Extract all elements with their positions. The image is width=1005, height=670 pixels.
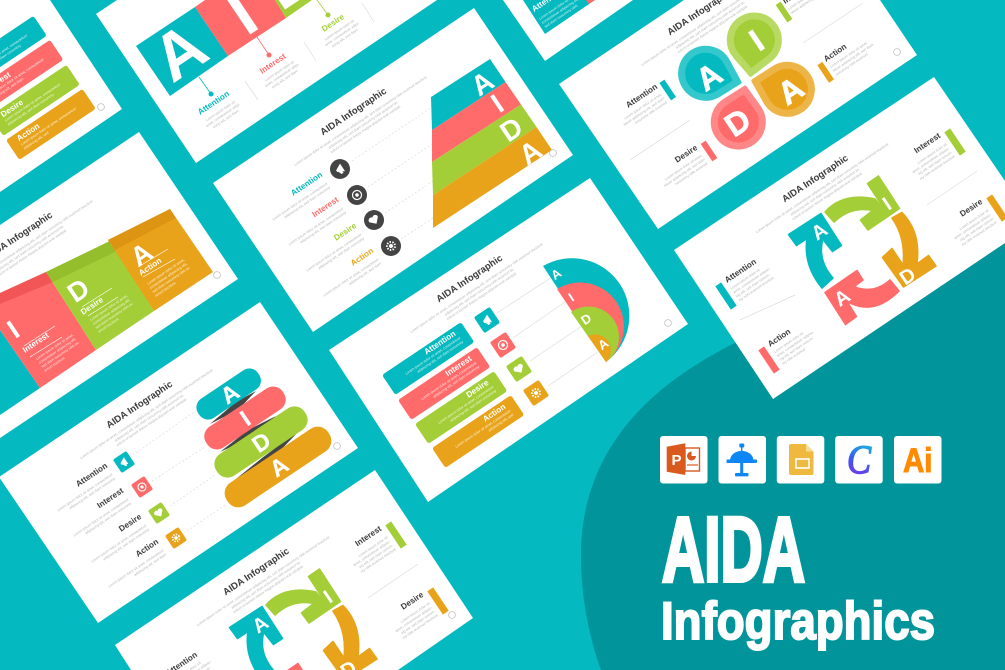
text desire: my nibh euismod tincidunt <box>961 220 998 247</box>
slide background <box>559 0 917 229</box>
petal teal A <box>674 42 746 107</box>
label attention: Attention <box>74 461 109 489</box>
teal pill: A <box>216 378 244 409</box>
text attention: Lorem ipsum dolor sit amet, <box>623 93 663 120</box>
intro text: Lorem ipsum dolor sit amet, consectetuer adipiscing elit, sed diam nonummy nibh euismod tincidunt <box>79 368 213 460</box>
action rules <box>138 249 175 277</box>
badge <box>98 104 104 110</box>
label desire: Desire <box>117 512 143 534</box>
intro text: adipiscing elit, sed diam nonummy nibh euismod tin <box>790 168 860 217</box>
red bar: Interest <box>444 354 474 378</box>
teal block <box>136 7 228 96</box>
slide background <box>503 0 633 61</box>
text action: amet, consectetuer adipisc- <box>776 330 815 358</box>
text action: Lorem ipsum dolor sit amet, <box>829 41 868 69</box>
label desire: Desire <box>399 590 425 612</box>
intro text: Lorem ipsum dolor sit amet, consectetuer adipiscing elit, sed diam nonummy nibh euismod tincidunt <box>293 75 427 167</box>
intro text: cidunt ut laoreet dolore magna aliquam erat volutpat. <box>677 4 749 54</box>
letter D: D <box>494 111 528 148</box>
text attention: tetuer adipiscing elit, sed diam <box>623 96 665 127</box>
icon: PowerPoint <box>660 436 708 484</box>
icon: gear <box>523 380 549 406</box>
green column <box>46 241 154 350</box>
bar interest <box>385 521 407 549</box>
text action: Lorem ipsum dolor sit <box>773 331 804 354</box>
text attention: Lorem ipsum dolor sit <box>205 100 236 122</box>
letter A: A <box>465 65 499 102</box>
text desire: Lorem ipsum dolor sit <box>324 19 355 41</box>
text attention: sed diam nonummy nibh <box>544 4 578 29</box>
text attention: adipiscing elit, sed diam nonummy <box>68 476 116 510</box>
label interest: Interest <box>311 195 340 219</box>
orange band <box>433 127 552 228</box>
orange bar: adipiscing elit, sed <box>23 131 49 150</box>
label attention: Attention <box>289 170 324 198</box>
text interest: ing elit, sed diam nonum- <box>358 543 395 569</box>
red column <box>0 272 96 388</box>
text desire: sed diam nonummy nibh eu <box>95 302 134 330</box>
text interest: adipiscing elit, sed diam nonummy <box>299 210 347 244</box>
intro text: cidunt ut laoreet dolore magna aliquam erat volutpat. <box>792 171 863 221</box>
slide background <box>0 0 122 192</box>
label attention: Attention <box>723 257 758 285</box>
text action: ing elit, sed diam nonum- <box>779 336 815 362</box>
label action: Action <box>134 537 160 559</box>
text interest: Lorem ipsum dolor sit <box>264 60 295 82</box>
teal band <box>431 59 506 130</box>
text action: nonummy nibh euismod <box>835 52 869 77</box>
orange column <box>108 209 213 311</box>
text interest: amet, consectetuer adipisc- <box>911 146 951 174</box>
text desire: Lorem ipsum dolor sit <box>959 209 990 231</box>
teal bar: Attention <box>422 329 457 357</box>
badge <box>334 443 340 449</box>
heading: AIDA Infographic <box>318 86 389 138</box>
green bar <box>415 371 507 444</box>
icon: target <box>343 181 371 209</box>
green bar: adipiscing elit, sed diam nonummy <box>7 92 55 126</box>
icon: Illustrator <box>894 436 942 484</box>
teal bar: adipiscing elit, sed diam nonummy <box>416 340 464 374</box>
intro text: Lorem ipsum dolor sit amet, consectetuer adipiscing elit, sed diam nonummy nibh euismod tincidunt <box>196 535 330 627</box>
petal orange A: A <box>771 69 810 112</box>
text interest: my nibh euismod tincidunt <box>919 154 956 181</box>
heading: AIDA Infographic <box>104 379 175 431</box>
icon: gear <box>377 232 405 260</box>
text desire: my nibh euismod tincidunt <box>402 613 439 640</box>
connector attention <box>199 77 214 96</box>
badge <box>214 272 220 278</box>
panel: slide with stacked pills, left <box>0 302 358 623</box>
label interest: Interest <box>258 52 288 76</box>
text desire: adipiscing elit, sed diam nonummy <box>317 236 365 270</box>
bar action <box>817 62 834 83</box>
label action: Action <box>822 42 848 64</box>
slide background <box>115 470 473 670</box>
icon: heart <box>506 356 532 382</box>
text desire: ing elit, sed diam nonum- <box>400 609 437 635</box>
cycle arrows copy <box>156 521 449 670</box>
text desire: Lorem ipsum dolor sit amet, <box>89 294 128 322</box>
arrow orange <box>324 606 377 670</box>
orange bar: Lorem ipsum dolor sit amet, consectetuer <box>20 106 77 146</box>
orange bar: adipiscing elit, sed <box>488 413 514 433</box>
badge <box>449 612 455 618</box>
connector interest <box>257 37 272 58</box>
letter I: I <box>485 88 509 119</box>
panel: slide with nested semicircles, centre <box>329 178 688 502</box>
intro text: adipiscing elit, sed diam nonummy nibh euismod tin <box>328 101 398 150</box>
nested semicircles: A <box>548 265 565 283</box>
text action: tetuer adipiscing elit, sed diam <box>832 43 874 73</box>
icon: Illustrator: Ai <box>903 442 932 480</box>
slide background <box>96 0 437 163</box>
text desire: Lorem ipsum dolor sit <box>400 602 431 624</box>
green bar: Lorem ipsum dolor sit amet, consectetuer <box>438 385 495 425</box>
text desire: adipiscing elit, sed diam nonummy <box>102 527 150 561</box>
text action: Lorem ipsum dolor sit amet, <box>146 258 185 286</box>
icon: heart <box>148 502 170 524</box>
panel: slide with IDA columns, left <box>0 132 238 438</box>
text desire: Lorem ipsum dolor sit amet, <box>664 154 703 181</box>
label attention: Attention <box>624 82 659 110</box>
teal bar: Lorem ipsum dolor sit amet, consectetuer <box>405 336 462 376</box>
orange pill <box>220 422 336 512</box>
text interest: sed diam nonummy nibh eu <box>41 341 80 369</box>
text interest: amet, consectetuer adipi- <box>264 62 301 88</box>
teal column <box>0 330 40 415</box>
label action: Action <box>766 327 792 349</box>
letter A: A <box>125 237 158 272</box>
orange bar: Lorem ipsum dolor sit amet, consectetuer <box>455 409 512 449</box>
badge <box>665 320 671 326</box>
label desire: Desire <box>79 295 105 317</box>
intro text: Lorem ipsum dolor sit amet, consectetuer adipiscing elit, sed diam nonummy nibh euismod tincidunt <box>409 242 543 334</box>
bar attention <box>659 80 676 100</box>
petal red D: D <box>718 101 757 144</box>
green pill: D <box>247 427 275 458</box>
teal bar <box>382 322 474 395</box>
intro text: adipiscing elit, sed diam nonummy nibh euismod tin <box>675 1 745 50</box>
text interest: my nibh euismod tincidunt <box>360 547 397 574</box>
nested semicircles <box>543 258 629 362</box>
intro text: cidunt ut laoreet dolore magna aliquam erat volutpat. <box>446 271 518 321</box>
icon: heart <box>360 206 388 234</box>
icon: megaphone <box>326 155 354 183</box>
arrow orange <box>882 212 936 290</box>
icon: megaphone <box>474 307 500 333</box>
arrow teal: A <box>808 219 832 245</box>
green bar <box>0 65 80 136</box>
text desire: consectetuer adipiscing elit, <box>92 298 131 326</box>
arrow green: I <box>879 194 896 215</box>
label desire: Desire <box>320 12 346 34</box>
text desire: Lorem ipsum dolor sit amet, consectetuer <box>306 233 363 273</box>
nested semicircles: D <box>578 310 594 328</box>
teal bar <box>0 16 47 87</box>
text attention: Lorem ipsum dolor sit amet, consectetuer <box>272 182 329 222</box>
bar action <box>758 346 780 374</box>
orange bar <box>432 395 524 468</box>
petal orange A <box>747 56 818 120</box>
orange bar: Action <box>481 402 507 424</box>
connector desire <box>317 0 330 18</box>
slide background <box>0 302 358 623</box>
text interest: Lorem ipsum dolor sit amet, <box>35 333 74 361</box>
text desire: scing elit, sed diam <box>331 28 359 48</box>
label attention: Attention <box>196 89 231 117</box>
red bar <box>398 347 490 420</box>
orange bar <box>6 89 96 160</box>
petal green I <box>725 12 782 77</box>
text desire: ing elit, sed diam nonum- <box>959 216 996 242</box>
icon: Google Slides <box>777 436 824 484</box>
arrow teal <box>230 606 282 670</box>
letter A: A <box>513 134 547 171</box>
text desire: tetuer adipiscing elit, sed diam <box>663 157 706 188</box>
subtitle Infographics: Infographics <box>661 592 935 651</box>
arrow green <box>825 176 900 230</box>
slide background <box>213 8 573 332</box>
panel: slide with four petals, top right <box>559 0 917 229</box>
text action: ismod tincidunt <box>154 281 176 298</box>
text interest: ing elit, sed diam nonum- <box>917 150 954 176</box>
heading: AIDA Infographic <box>434 253 505 305</box>
icon: Keynote <box>718 436 766 484</box>
icon: PowerPoint: P <box>671 452 682 469</box>
text action: sed diam nonummy nibh eu <box>152 266 191 294</box>
intro text: adipiscing elit, sed diam nonummy nibh euismod tin <box>114 394 184 443</box>
text interest: consectetuer adipiscing elit, <box>38 337 77 365</box>
label desire: Desire <box>673 143 699 165</box>
red band <box>432 82 521 162</box>
text attention: ing elit, sed diam nonum- <box>735 272 771 298</box>
intro text: cidunt ut laoreet dolore magna aliquam erat volutpat. <box>116 397 188 447</box>
bar desire <box>986 194 1005 222</box>
icon: Canva: C <box>847 437 872 482</box>
icon: target <box>490 332 516 358</box>
panel: slide with AIDA blocks, top <box>96 0 437 163</box>
green block <box>275 0 312 18</box>
label interest: Interest <box>354 524 383 548</box>
pill shadow slivers <box>210 391 302 483</box>
text desire: amet, consectetuer adipi- <box>324 21 361 47</box>
red bar: Lorem ipsum dolor sit amet, consectetuer <box>421 361 478 401</box>
panel: slide with cycle arrows, bottom <box>115 470 473 670</box>
bar desire <box>427 587 449 615</box>
teal block <box>523 0 595 34</box>
icon: megaphone <box>113 451 135 473</box>
label interest: Interest <box>96 486 125 510</box>
panel: slide with cycle arrows, right <box>674 77 1005 399</box>
red block <box>195 0 286 56</box>
heading: AIDA Infographic <box>221 546 291 598</box>
bar interest <box>776 2 792 22</box>
orange bar: Action <box>15 122 41 143</box>
red pill: I <box>235 406 255 431</box>
arrow red: A <box>830 285 854 311</box>
text interest: scing elit, sed diam <box>271 69 299 89</box>
intro text: Lorem ipsum dolor sit amet, consectetuer adipiscing elit, sed diam nonummy nibh euismod tincidunt <box>755 142 889 234</box>
text attention: nonummy nibh euismod <box>634 100 668 125</box>
text desire: ismod tincidunt <box>97 317 119 334</box>
letter I: I <box>2 315 25 344</box>
title AIDA: AIDA <box>662 499 805 601</box>
text attention: Lorem ipsum dolor sit amet, consectetuer <box>57 473 114 513</box>
label interest: Interest <box>913 131 942 155</box>
intro text: cidunt ut laoreet dolore magna aliquam erat volutpat. <box>330 104 402 154</box>
bar desire <box>701 141 717 161</box>
label desire: Desire <box>332 221 358 243</box>
bar interest <box>944 128 966 156</box>
icon: Canva <box>835 436 883 484</box>
panel: slide with funnel bands, centre <box>213 8 573 332</box>
red block <box>586 0 595 4</box>
badge <box>550 150 556 156</box>
green bar: adipiscing elit, sed diam nonummy <box>449 389 497 423</box>
arrow green <box>266 569 340 623</box>
slide background <box>0 132 238 438</box>
intro text: cidunt ut laoreet dolore magna aliquam erat volutpat. <box>233 564 304 614</box>
text action: my nibh euismod <box>781 347 806 366</box>
text desire: nonummy nibh euismod <box>674 161 708 186</box>
text desire: Lorem ipsum dolor sit amet, consectetuer <box>91 524 148 564</box>
nested semicircles: A <box>595 335 612 353</box>
text action: adipiscing elit, sed diam <box>348 261 382 286</box>
letter D: D <box>62 273 95 308</box>
orange pill: A <box>265 451 293 482</box>
petal teal A: A <box>689 55 729 98</box>
dark curved panel <box>581 230 1005 670</box>
text attention: Lorem ipsum dolor sit <box>730 268 761 290</box>
intro text: adipiscing elit, sed diam nonummy nibh euismod tin <box>231 561 301 610</box>
panel: slide partially visible, top centre <box>503 0 633 61</box>
bar attention <box>715 282 737 310</box>
text attention: amet, consectetuer adipi- <box>205 102 242 128</box>
label desire: Desire <box>958 197 984 219</box>
arrow red <box>825 270 899 324</box>
petal red D <box>708 83 770 152</box>
label action: Action <box>137 256 163 278</box>
text interest: amet, consectetuer adipisc- <box>352 539 392 567</box>
green bar: Desire <box>465 378 491 400</box>
arrow green: I <box>320 587 337 608</box>
text attention: my nibh euismod tincidunt <box>738 276 775 302</box>
arrow orange: D <box>896 264 920 290</box>
text action: adipiscing elit, sed diam <box>133 552 167 577</box>
label interest: Interest <box>21 331 51 355</box>
text interest: adipiscing elit, sed diam nonummy <box>84 501 132 535</box>
text attention: scing elit, sed diam <box>212 109 240 129</box>
text action: Lorem ipsum dolor sit amet, consectetuer <box>108 549 165 589</box>
text action: consectetuer adipiscing elit, <box>149 262 188 290</box>
badge <box>894 49 900 55</box>
panel: slide with stacked bars, top left <box>0 0 122 192</box>
green bar: Lorem ipsum dolor sit amet, consectetuer <box>4 82 61 122</box>
label action: Action <box>349 246 375 268</box>
text desire: amet, consectetuer adipisc- <box>394 605 434 633</box>
arrow teal: A <box>249 612 273 638</box>
letter A: A <box>139 8 220 96</box>
text attention: adipiscing elit, sed diam nonummy <box>283 185 331 219</box>
teal pill <box>192 363 266 425</box>
red bar: adipiscing elit, sed diam nonummy <box>432 365 480 399</box>
text interest: Lorem ipsum dolor sit <box>917 143 948 165</box>
text desire: amet, consectetuer adipisc- <box>953 212 993 240</box>
green band <box>432 104 536 195</box>
icon: gear <box>165 527 187 549</box>
interest column text <box>24 326 62 357</box>
red pill <box>200 382 291 455</box>
icon: target <box>131 476 153 498</box>
text interest: Lorem ipsum dolor sit amet, consectetuer <box>288 207 345 247</box>
arrow red <box>266 664 340 670</box>
arrow teal <box>788 214 842 288</box>
petal green I: I <box>743 23 770 58</box>
slide background <box>329 178 688 502</box>
text interest: ismod tincidunt <box>43 356 65 373</box>
heading: AIDA Infographic <box>780 153 850 205</box>
green pill <box>210 402 312 483</box>
text interest: Lorem ipsum dolor sit amet, consectetuer <box>73 498 130 538</box>
text interest: Lorem ipsum dolor sit <box>358 536 389 558</box>
intro text: adipiscing elit, sed diam nonummy nibh euismod tin <box>444 268 514 317</box>
text action: Lorem ipsum dolor sit amet, consectetuer <box>323 258 380 298</box>
red bar <box>0 40 63 111</box>
slide background <box>674 77 1005 399</box>
desire rules <box>82 288 118 316</box>
nested semicircles: I <box>565 290 577 304</box>
text attention: amet, consectetuer adipisc- <box>733 266 772 294</box>
